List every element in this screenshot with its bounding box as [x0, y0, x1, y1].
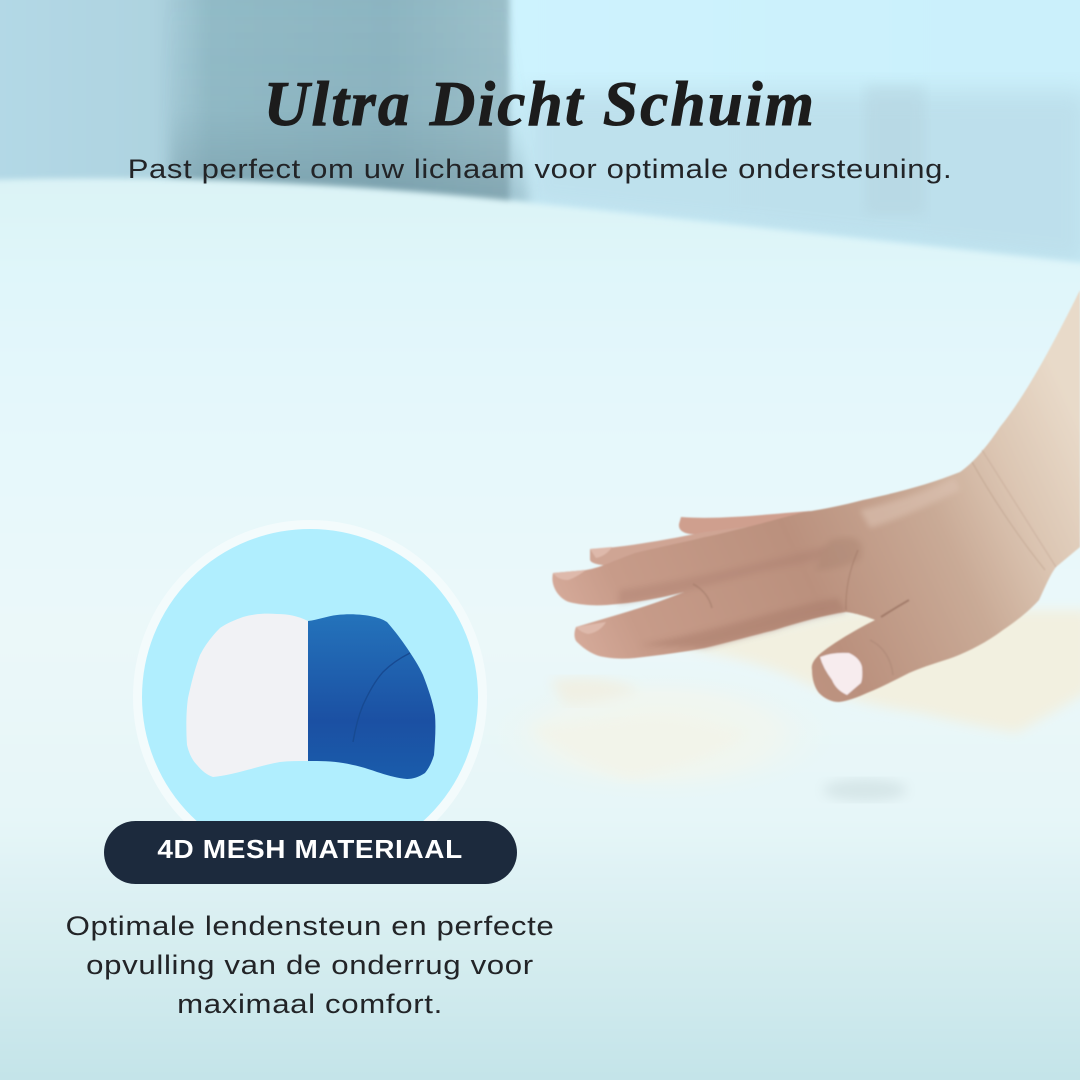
description text: Optimale lendensteun en perfecte — [66, 911, 554, 941]
description text — [66, 911, 554, 1019]
circle background — [133, 520, 487, 874]
foam imprint under hand — [470, 610, 1080, 805]
hand — [552, 290, 1080, 702]
icon: thumbnail — [820, 653, 862, 695]
label pill: 4D MESH MATERIAAL — [158, 834, 463, 864]
circle badge with product — [133, 520, 487, 821]
description text: opvulling van de onderrug voor — [86, 950, 534, 980]
title: Ultra Dicht Schuim — [264, 69, 816, 139]
icon: lumbar cushion half white half blue — [186, 614, 436, 779]
label pill — [104, 821, 517, 884]
subtitle: Past perfect om uw lichaam voor optimale ondersteuning. — [128, 154, 952, 184]
description text: maximaal comfort. — [177, 989, 443, 1019]
